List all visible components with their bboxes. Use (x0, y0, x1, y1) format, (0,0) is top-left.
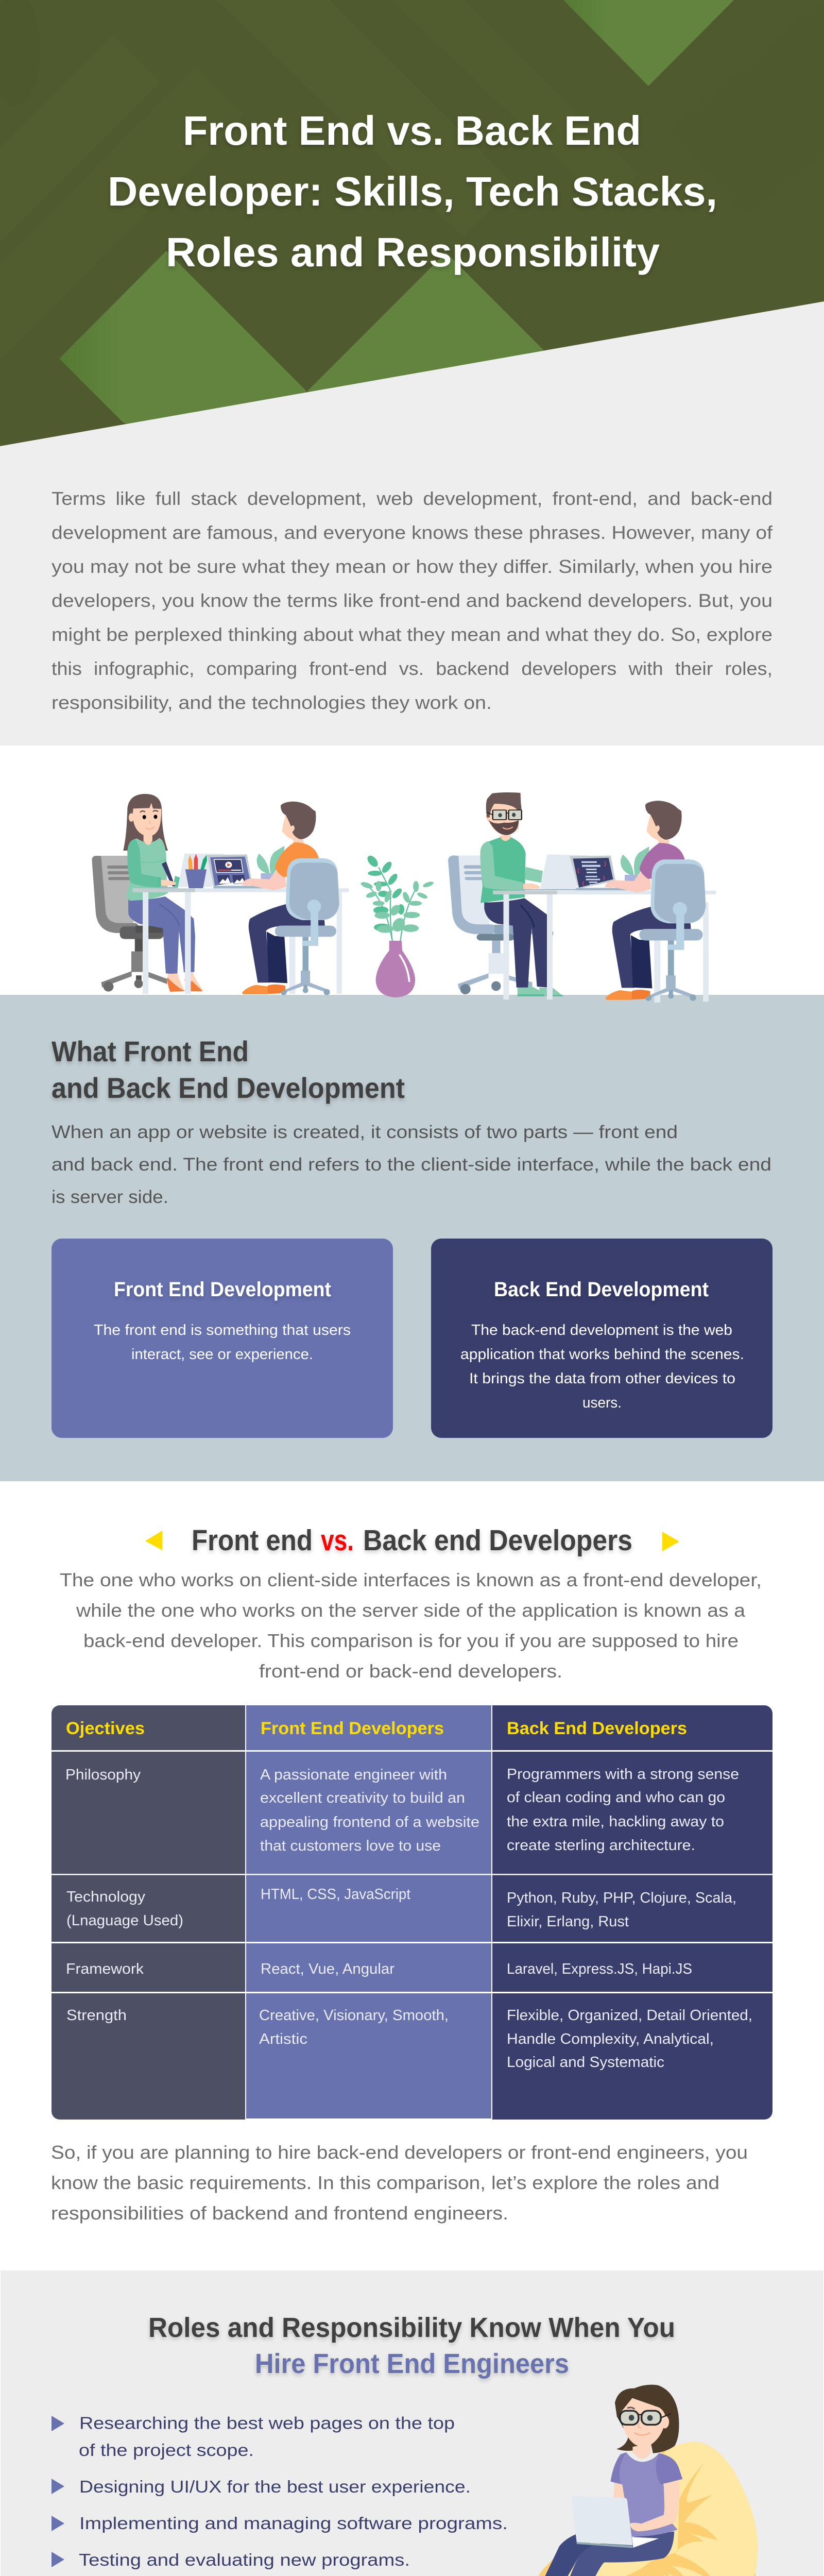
card: back end development: The back-end development is the web (471, 1322, 732, 1338)
table row: framework: Laravel, Express.JS, Hapi.JS (507, 1961, 692, 1977)
icon: man in orange seen from behind (242, 802, 339, 995)
heading: front end vs back end developers: Back end Developers (363, 1524, 632, 1557)
intro paragraph (52, 488, 773, 713)
table row: technology: HTML, CSS, JavaScript (261, 1886, 410, 1903)
table row: technology: Elixir, Erlang, Rust (507, 1913, 629, 1930)
table row: philosophy: appealing frontend of a website (260, 1814, 479, 1831)
table row: technology (66, 1886, 736, 1930)
intro paragraph: might be perplexed thinking about what they mean and what they do. So, explore (52, 624, 772, 645)
table row: philosophy (65, 1766, 739, 1854)
table row: philosophy: the extra mile, hackling away to (507, 1814, 724, 1830)
icon: laptop, pencil cup (158, 854, 264, 888)
text: comparison summary: know the basic requirements. In this comparison, let’s explore the roles and (51, 2172, 719, 2193)
text: comparison intro: back-end developer. This comparison is for you if you are supposed to hire (83, 1630, 739, 1651)
table row: philosophy: A passionate engineer with (260, 1767, 447, 1783)
card: front end development: interact, see or experience. (131, 1346, 313, 1363)
heading: what front end and back end development (52, 1035, 405, 1104)
icon: woman on yellow beanbag with laptop (479, 2385, 771, 2576)
title: Roles and Responsibility (166, 229, 660, 275)
table row: strength: Strength (66, 2007, 127, 2024)
intro paragraph: Terms like full stack development, web development, front-end, and back-end (52, 488, 772, 509)
table row: technology: Technology (66, 1889, 146, 1905)
table row: framework (66, 1961, 692, 1977)
heading: hire front end engineers: Hire Front End Engineers (255, 2348, 569, 2379)
heading: what front end and back end development: and Back End Development (52, 1072, 405, 1104)
text: comparison intro: The one who works on client-side interfaces is known as a front-end developer, (60, 1569, 762, 1590)
title: Developer: Skills, Tech Stacks, (108, 168, 717, 214)
card: front end development: The front end is something that users (94, 1322, 351, 1338)
list: front end responsibilities: Implementing and managing software programs. (79, 2514, 508, 2533)
table row: strength (66, 2007, 752, 2071)
text: development definition: When an app or website is created, it consists of two parts — front end (52, 1122, 678, 1142)
card: front end development: Front End Development (114, 1278, 331, 1301)
icon: code laptop (519, 854, 629, 890)
title: Front End vs. Back End (183, 108, 641, 154)
table row: philosophy: excellent creativity to build an (260, 1790, 465, 1806)
table row: strength: Logical and Systematic (507, 2054, 664, 2071)
card: front end development (52, 1239, 393, 1438)
text: development definition: and back end. The front end refers to the client-side interface, while the back end (52, 1155, 771, 1175)
text: comparison intro: while the one who works on the server side of the application is known as a (76, 1600, 746, 1621)
panel: what front end and back end development background (0, 995, 824, 1481)
card: back end development: Back End Development (494, 1278, 709, 1301)
intro paragraph: this infographic, comparing front-end vs. backend developers with their roles, (52, 658, 772, 679)
list: front end responsibilities: Testing and evaluating new programs. (79, 2550, 410, 2569)
icon: desk (133, 888, 349, 994)
heading: hire front end engineers: Roles and Responsibility Know When You (148, 2312, 675, 2343)
illustration: bearded man and colleague at desk (448, 792, 716, 999)
table row: strength: Flexible, Organized, Detail Oriented, (507, 2007, 752, 2024)
panel: header banner (0, 0, 824, 464)
intro paragraph: you may not be sure what they mean or how they differ. Similarly, when you hire (52, 556, 772, 577)
illustration: woman and man at desk (92, 794, 349, 995)
text: comparison intro (60, 1569, 762, 1682)
table row: strength: Artistic (259, 2031, 307, 2047)
icon: vase with plant (359, 855, 435, 997)
title (108, 108, 717, 275)
text: comparison summary: So, if you are planning to hire back-end developers or front-end engineers, you (51, 2142, 748, 2163)
panel: intro background (0, 258, 824, 745)
icon: bearded developer (480, 792, 563, 996)
heading: hire front end engineers (148, 2312, 675, 2379)
card: back end development: users. (582, 1395, 622, 1411)
table header row: Back End Developers (507, 1719, 687, 1738)
intro paragraph: developers, you know the terms like front-end and backend developers. But, you (52, 590, 772, 611)
table row: framework: React, Vue, Angular (261, 1961, 394, 1977)
table row: philosophy: of clean coding and who can go (507, 1789, 725, 1806)
heading: front end vs back end developers: vs. (321, 1524, 354, 1557)
card: back end development: It brings the data from other devices to (469, 1370, 735, 1387)
list: front end responsibilities: Designing UI/UX for the best user experience. (79, 2477, 471, 2496)
list: front end responsibilities (52, 2413, 508, 2576)
table row: philosophy: Philosophy (65, 1767, 141, 1783)
heading: what front end and back end development: What Front End (52, 1035, 249, 1067)
card: back end development: application that works behind the scenes. (460, 1346, 744, 1363)
table row: framework: Framework (66, 1961, 144, 1977)
icon: grey office chair (92, 856, 178, 992)
table row: technology: Python, Ruby, PHP, Clojure, Scala, (507, 1890, 736, 1906)
heading: front end vs back end developers (145, 1524, 679, 1557)
text: comparison intro: front-end or back-end developers. (259, 1660, 562, 1682)
icon: woman developer (123, 794, 203, 992)
table row: strength: Creative, Visionary, Smooth, (259, 2007, 449, 2024)
text: comparison summary (51, 2142, 748, 2224)
table header row: Ojectives (66, 1719, 145, 1738)
list: front end responsibilities: of the project scope. (79, 2441, 254, 2460)
icon: man in purple seen from behind (605, 801, 709, 1003)
table row: philosophy: create sterling architecture. (507, 1837, 695, 1854)
table header row (66, 1719, 687, 1738)
heading: front end vs back end developers: Front end (192, 1524, 313, 1557)
table header row: Front End Developers (261, 1719, 444, 1738)
icon: blue office chair (448, 855, 535, 994)
list: front end responsibilities: Researching the best web pages on the top (79, 2413, 455, 2433)
table row: technology: (Lnaguage Used) (66, 1912, 183, 1929)
panel: hire front end engineers (1, 2270, 823, 2576)
text: comparison summary: responsibilities of backend and frontend engineers. (51, 2202, 508, 2224)
table row: philosophy: Programmers with a strong sense (507, 1766, 739, 1783)
intro paragraph: development are famous, and everyone knows these phrases. However, many of (52, 522, 773, 543)
intro paragraph: responsibility, and the technologies they work on. (52, 692, 492, 713)
comparison table (52, 1705, 772, 2120)
text: development definition: is server side. (52, 1187, 168, 1207)
text: development definition (52, 1122, 771, 1207)
icon: desk (493, 891, 716, 999)
card: back end development (431, 1239, 772, 1438)
table row: strength: Handle Complexity, Analytical, (507, 2031, 714, 2047)
table row: philosophy: that customers love to use (260, 1838, 441, 1854)
